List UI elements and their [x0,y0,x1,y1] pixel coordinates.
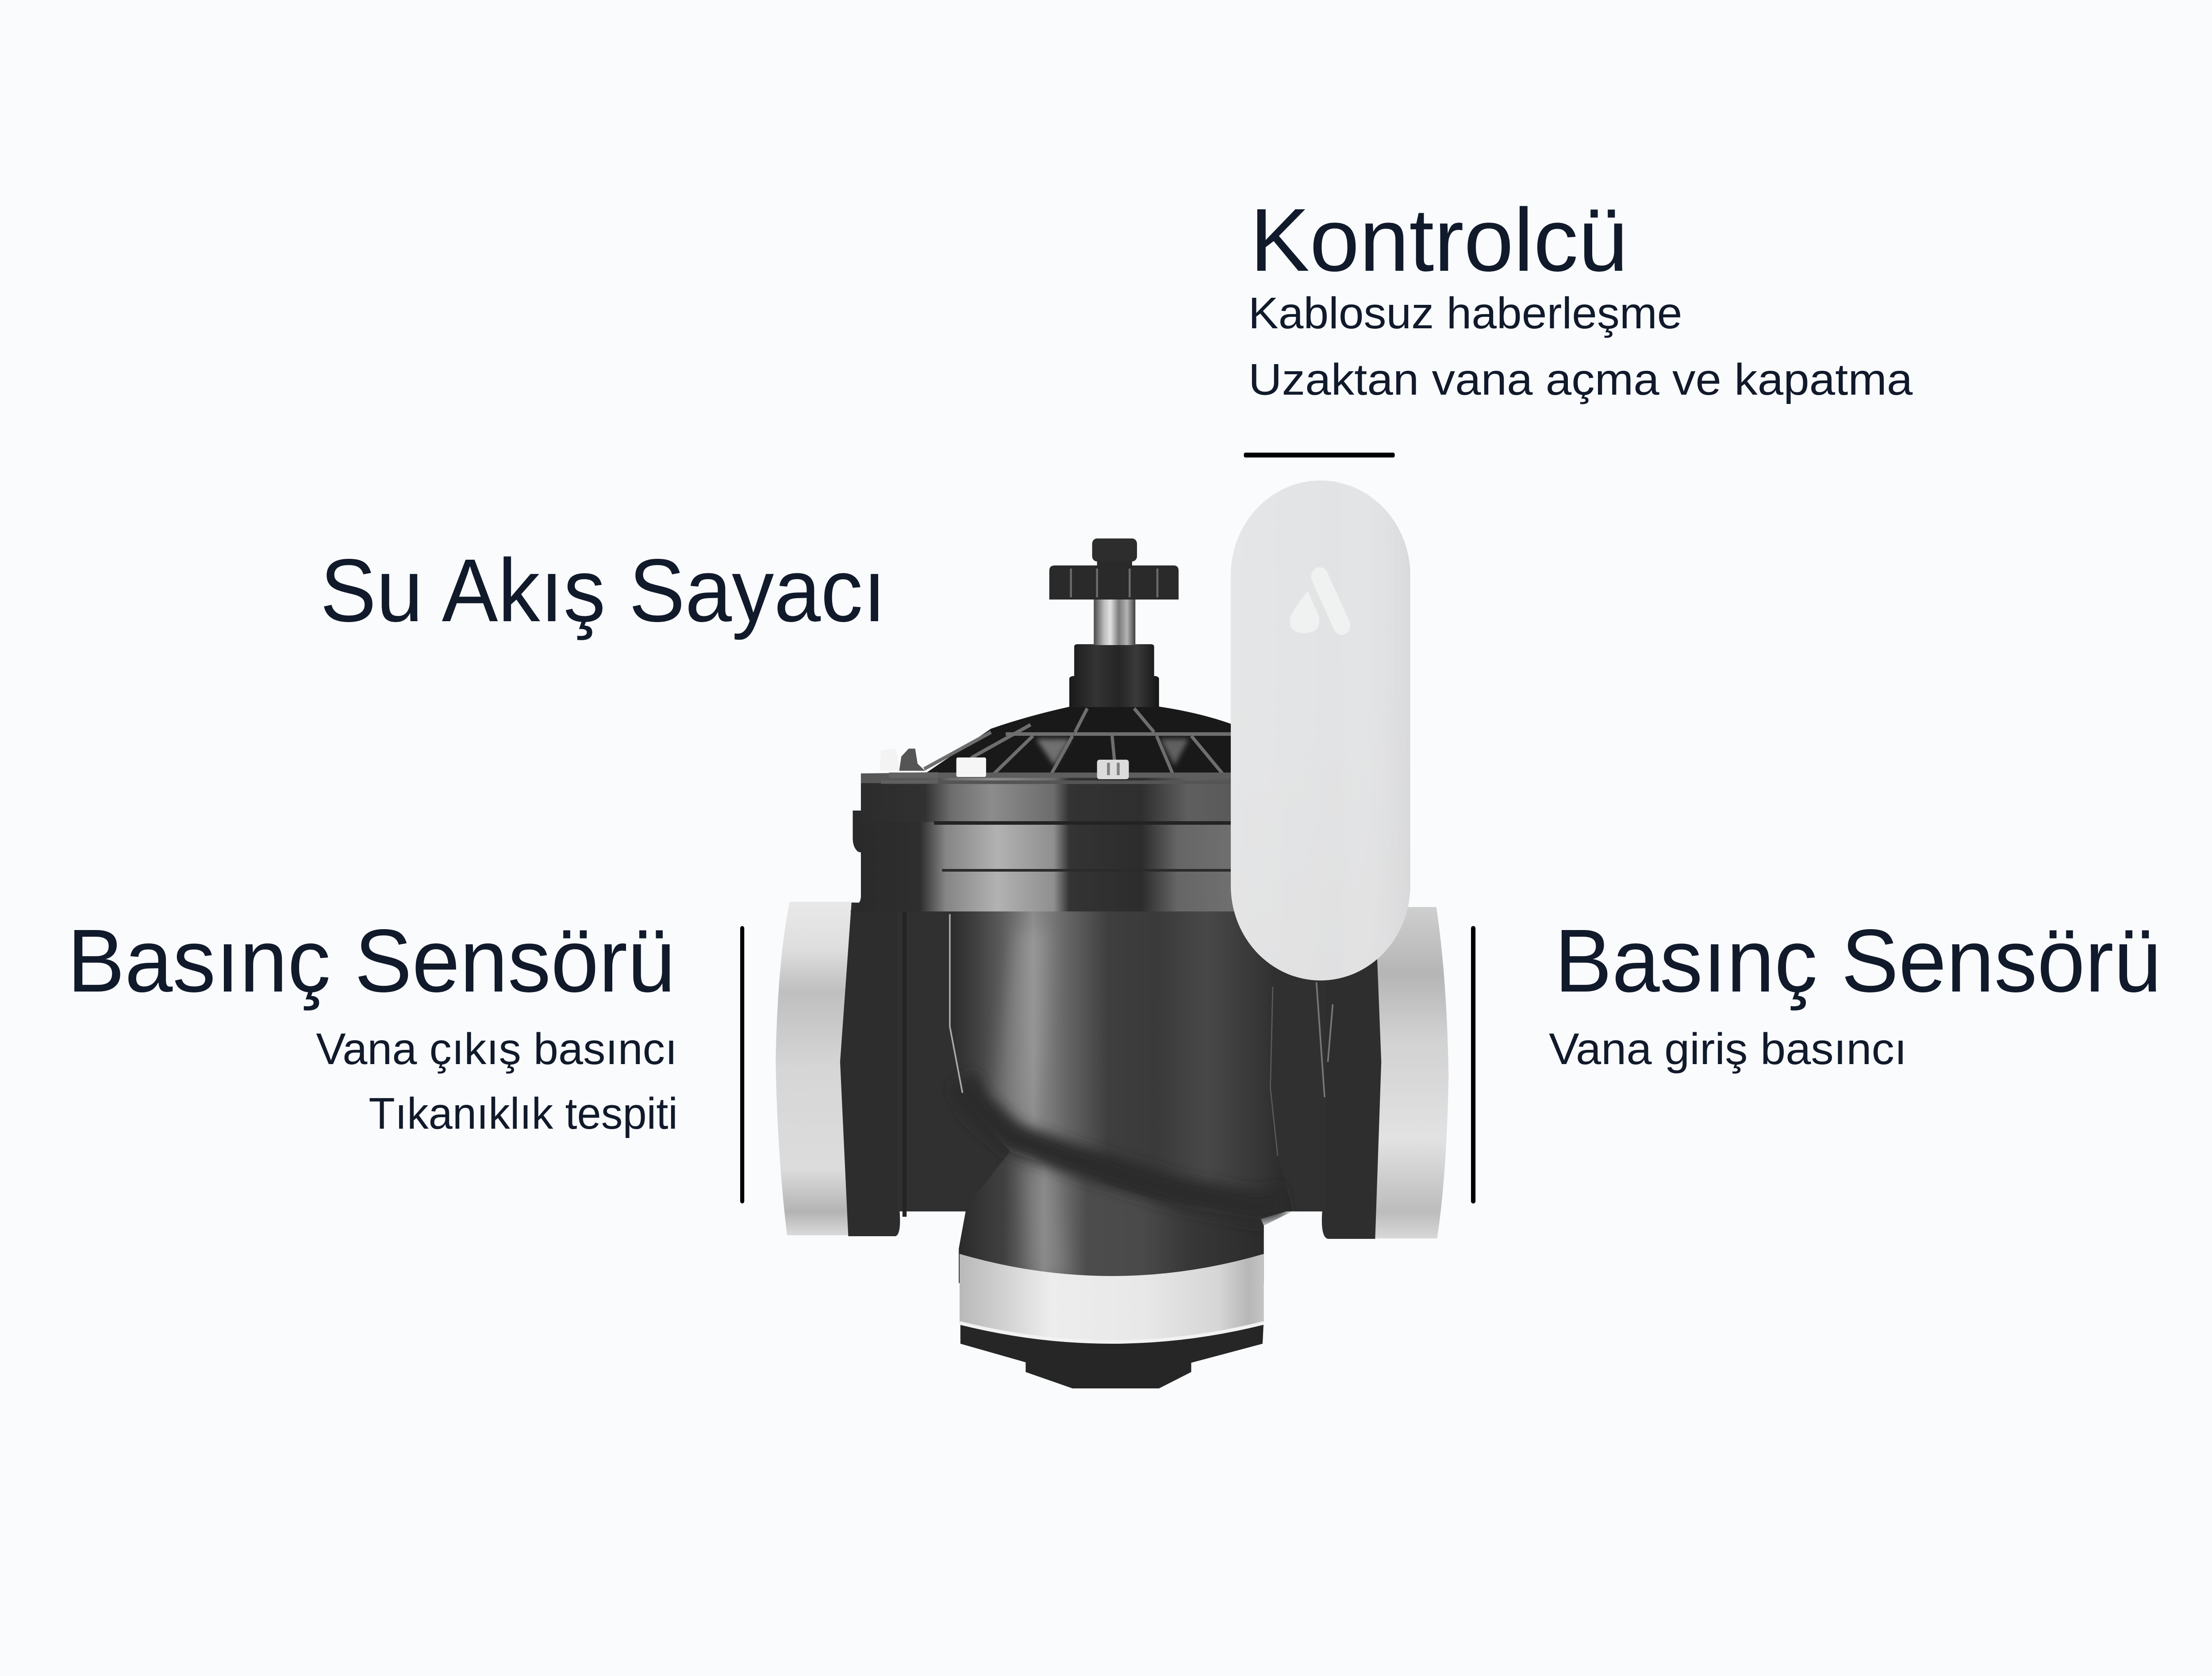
cap left shoulder [861,772,938,783]
heading: right Basınç Sensörü: Basınç Sensörü [1555,911,2162,1011]
bolt 2 detail [1109,763,1118,775]
left metal end disc [776,902,854,1235]
divider: controller [1244,453,1395,457]
black base foot [960,1319,1264,1388]
logo left drop [1290,591,1319,633]
bolt 3 dark part [899,749,925,771]
heading: Kontrolcü: Kontrolcü [1250,190,1628,290]
dome [924,707,1309,774]
bowl left light edge [950,914,963,1093]
bolt 3 [879,749,900,771]
valve illustration [776,538,1448,1388]
dome shaded panels [1036,739,1189,765]
ledge dark line [942,869,1232,872]
neck highlight streaks [1024,1168,1068,1274]
dome panel highlight left [1036,739,1071,765]
dome panel highlight right [1160,739,1189,765]
central body block [897,905,1325,1211]
heading: Su Akış Sayacı: Su Akış Sayacı [320,541,886,641]
middle cap ring [853,811,1368,863]
main valve bowl [952,909,1292,1220]
bowl lower shadow [963,1080,1285,1208]
handle gear [1049,558,1179,600]
collar upper [1074,644,1154,677]
lower ring ledge [945,861,1232,866]
divider: left pressure sensor [740,926,744,1203]
heading: left Basınç Sensörü: Basınç Sensörü [67,911,676,1011]
bonnet dark line [906,908,1276,917]
upper cap band [861,773,1368,822]
cap top light line [881,780,1232,784]
handle top nut [1092,538,1137,561]
ring lower light edge [960,1323,1264,1342]
right body seam [1270,987,1278,1156]
text: Vana çıkış basıncı: Vana çıkış basıncı [316,1025,677,1074]
left black flange [840,903,900,1236]
shadow stroke [963,1080,1285,1208]
controller module [1231,481,1410,980]
bolt 2 [1097,760,1129,779]
gear light lines [1071,569,1157,597]
right metal end disc [1375,907,1448,1238]
dome ledge [889,773,1236,778]
right flange light seam [1317,982,1333,1097]
right black flange [1322,907,1381,1239]
bowl highlight streak [995,929,1048,1124]
text: Kablosuz haberleşme: Kablosuz haberleşme [1248,289,1682,338]
dome ribs [924,708,1236,776]
controller pill body [1231,481,1410,980]
controller pill shading [1231,481,1410,980]
lower metal ring [960,1254,1264,1342]
text: Tıkanıklık tespiti: Tıkanıklık tespiti [369,1089,678,1138]
collar lower [1069,676,1159,707]
lower cap band [850,852,1368,911]
logo right stroke [1320,577,1342,626]
divider: right pressure sensor [1471,926,1475,1203]
band dividing line [934,821,1236,825]
lower neck [959,1150,1264,1283]
text: Uzaktan vana açma ve kapatma: Uzaktan vana açma ve kapatma [1248,355,1913,404]
body left vertical seam [902,912,907,1217]
bolt 1 [956,757,986,777]
icon: controller logo [1290,577,1342,633]
text: Vana giriş basıncı: Vana giriş basıncı [1549,1025,1907,1074]
metal stem [1094,598,1135,645]
